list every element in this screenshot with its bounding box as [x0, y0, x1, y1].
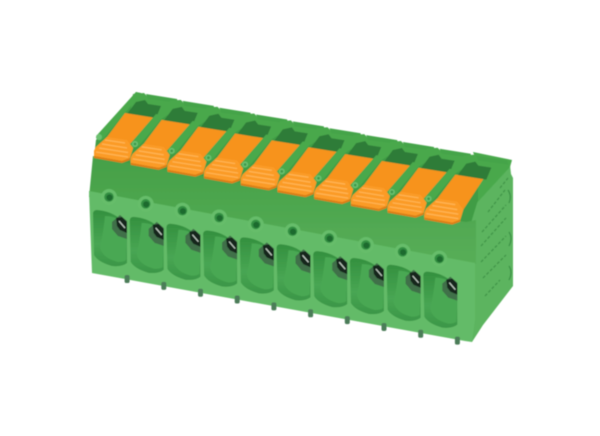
top crenellated rail units — [127, 93, 509, 182]
housing: side face — [465, 152, 513, 342]
green separator bars — [96, 92, 458, 203]
housing: upper front face — [89, 156, 476, 264]
housing: lower front face — [89, 191, 475, 342]
top rail background — [94, 92, 478, 226]
wire entry pockets, test holes and solder pins — [93, 189, 460, 345]
orange push buttons — [94, 113, 483, 225]
